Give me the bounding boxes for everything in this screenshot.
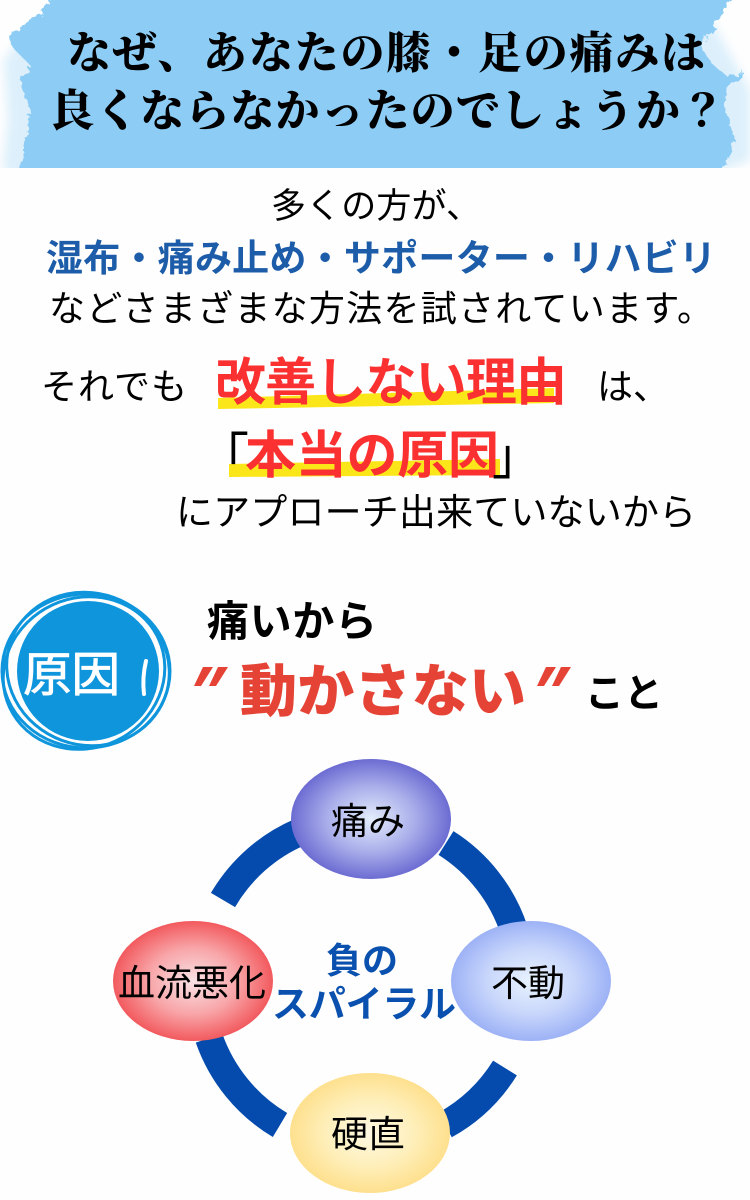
node: 硬直: 硬直 <box>331 1114 405 1155</box>
highlight 1 <box>218 388 554 409</box>
badge: 原因1 <box>0 570 191 776</box>
node: 硬直 <box>290 1073 450 1193</box>
cycle diagram: negative spiral <box>113 759 611 1193</box>
reason statement: 」 <box>492 429 542 485</box>
node: 痛み <box>291 759 451 879</box>
node: 血流悪化 <box>113 921 273 1041</box>
reason statement: は、 <box>597 366 669 407</box>
closing quote <box>537 667 571 686</box>
title text: 良くならなかったのでしょうか？ <box>50 87 725 136</box>
cause heading: 痛いから <box>207 598 377 645</box>
badge: 原因1: 原因 <box>23 649 120 702</box>
opening quote <box>194 667 228 686</box>
cause heading: こと <box>585 673 663 716</box>
brush background <box>3 0 750 180</box>
reason statement: 「 <box>199 429 249 485</box>
reason statement: 本当の原因 <box>245 427 499 484</box>
intro text <box>46 187 716 329</box>
cause heading <box>194 598 663 724</box>
reason statement <box>41 354 696 533</box>
reason statement: 改善しない理由 <box>215 354 567 411</box>
highlight 2 <box>229 459 500 477</box>
reason statement: それでも <box>41 366 187 407</box>
node: 痛み: 痛み <box>331 801 405 842</box>
intro text: などさまざまな方法を試されています。 <box>49 288 713 329</box>
center label <box>272 940 456 1025</box>
node: 不動: 不動 <box>491 963 565 1004</box>
center label: スパイラル <box>272 984 456 1025</box>
cycle arcs <box>209 832 514 1125</box>
intro text: 多くの方が、 <box>271 187 481 226</box>
remedies list: 湿布・痛み止め・サポーター・リハビリ <box>46 238 716 279</box>
node: 不動 <box>451 921 611 1041</box>
title text <box>50 29 725 136</box>
title text: なぜ、あなたの膝・足の痛みは <box>67 29 705 78</box>
reason statement: にアプローチ出来ていないから <box>176 492 696 533</box>
title banner <box>3 0 750 180</box>
center label: 負の <box>326 940 398 981</box>
cause heading: 動かさない <box>240 660 526 724</box>
node: 血流悪化: 血流悪化 <box>118 963 266 1004</box>
